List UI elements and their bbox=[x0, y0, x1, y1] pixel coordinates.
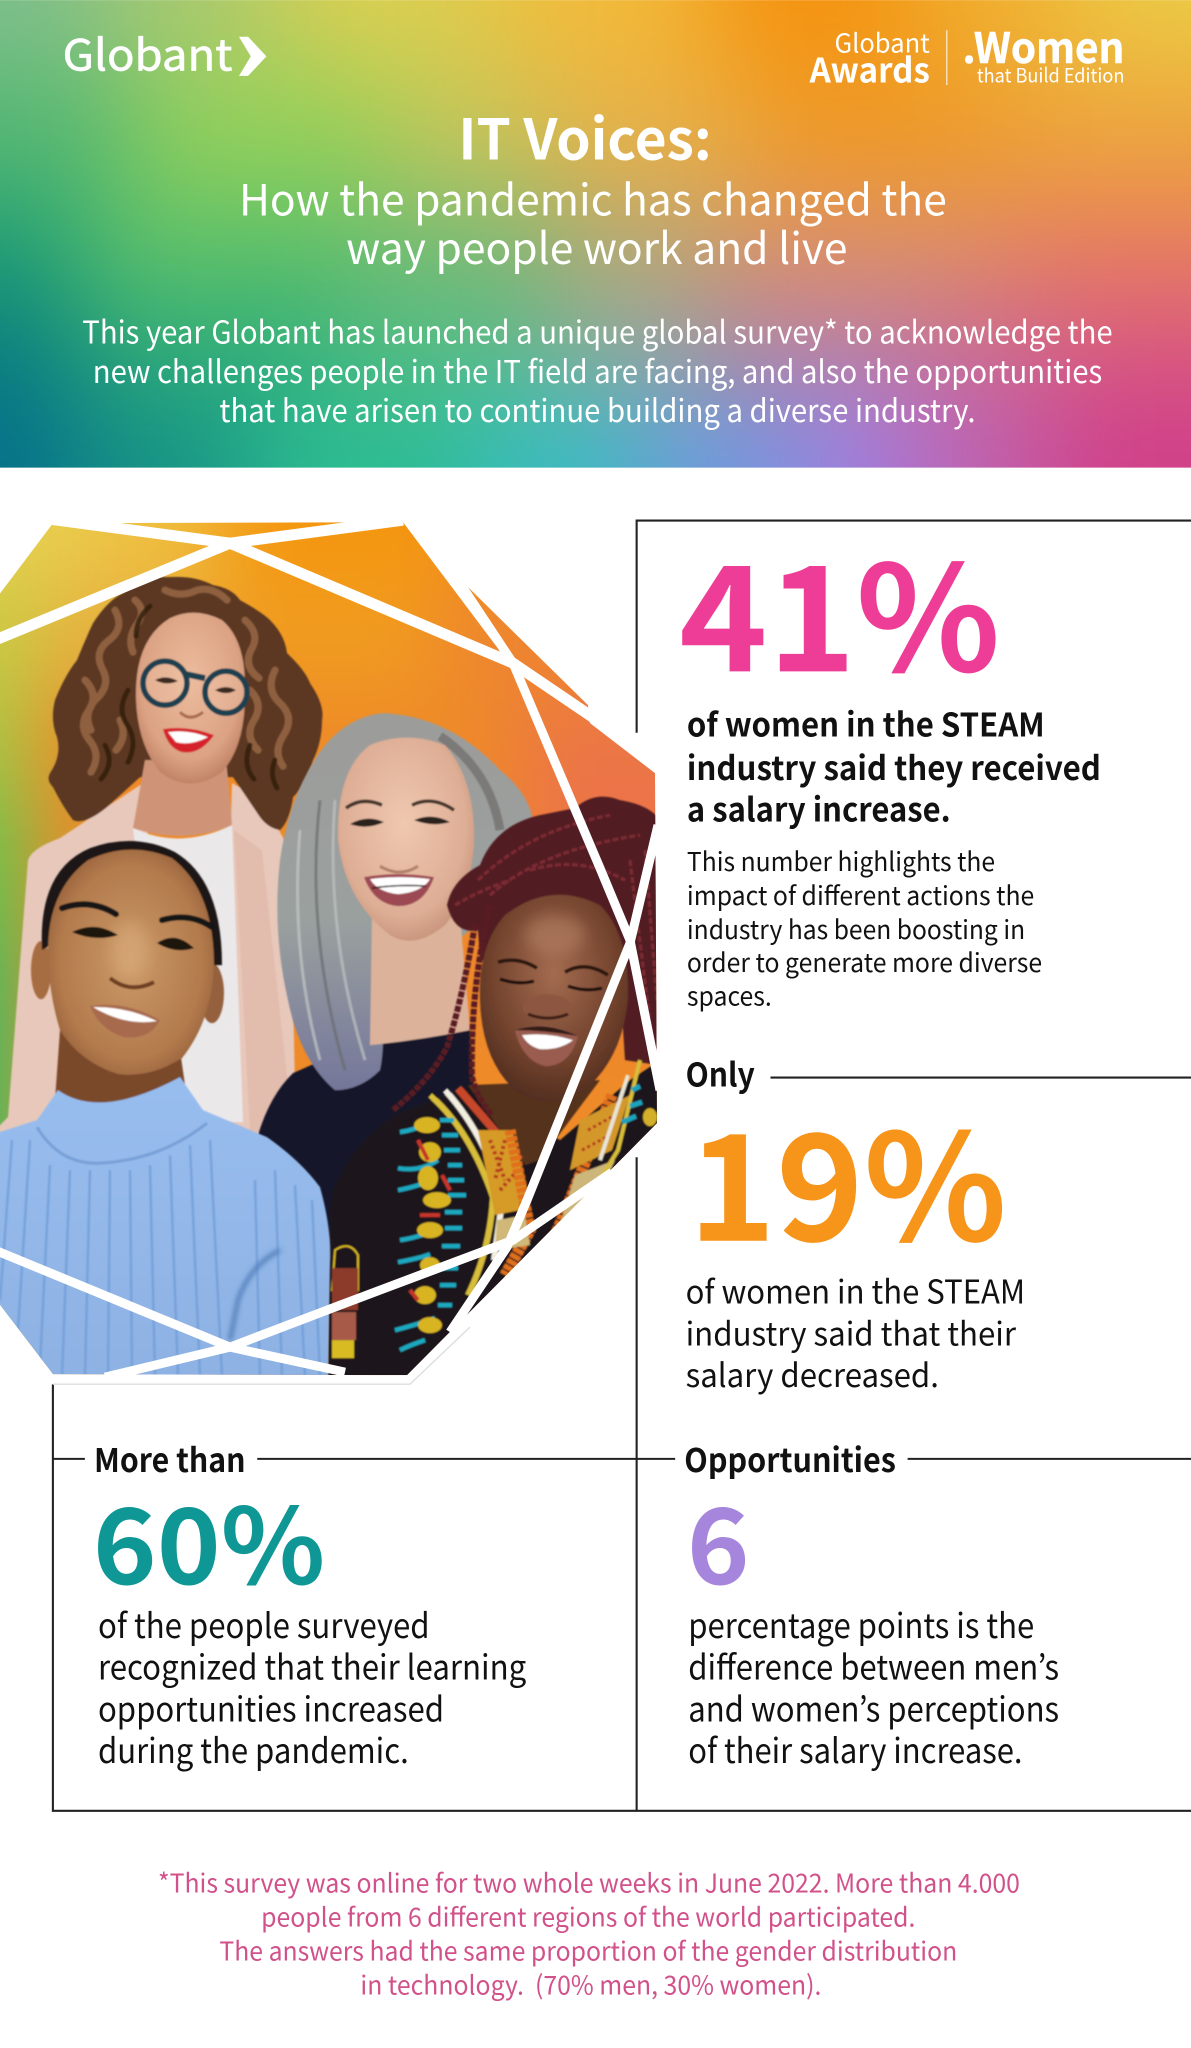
smile bbox=[515, 1025, 578, 1066]
collar bbox=[37, 1123, 207, 1163]
curly hair bbox=[49, 577, 322, 830]
grey hair bbox=[277, 713, 532, 1090]
stat: 41%: 41% bbox=[679, 502, 1000, 714]
label: More than: More than bbox=[94, 1435, 246, 1482]
text: salary decreased: of women in the STEAM bbox=[686, 1266, 1025, 1313]
text: salary decreased: industry said that their bbox=[686, 1308, 1016, 1355]
brows bbox=[498, 960, 608, 975]
logo: Globant Awards Women that Build Edition: .Women bbox=[962, 16, 1124, 76]
nose bbox=[380, 866, 418, 872]
logo: Globant Awards Women that Build Edition: Globant bbox=[834, 22, 930, 60]
jacket bbox=[0, 783, 296, 1135]
text: learning opportunities: recognized that their learning bbox=[98, 1641, 526, 1690]
logo: Globant: Globant bbox=[63, 22, 232, 84]
person: grey hair woman bbox=[258, 713, 532, 1260]
closed eyes bbox=[500, 979, 602, 990]
smile bbox=[364, 874, 434, 906]
polygon gradient background bbox=[0, 522, 657, 1376]
black top bbox=[258, 1029, 475, 1239]
label: Opportunities: Opportunities bbox=[684, 1435, 896, 1482]
intro paragraph bbox=[82, 309, 1113, 432]
neck bbox=[468, 1080, 600, 1165]
body text: diverse spaces bbox=[687, 841, 1042, 1014]
person: front woman in blue sweater bbox=[0, 841, 330, 1380]
neck and chest bbox=[133, 760, 232, 836]
text: perception difference: difference between men’s bbox=[688, 1641, 1059, 1690]
body text: diverse spaces: order to generate more diverse bbox=[687, 942, 1042, 980]
text: perception difference: percentage points is the bbox=[688, 1599, 1034, 1648]
locs back bbox=[447, 797, 660, 1065]
footnote: people from 6 different regions of the world participated. bbox=[261, 1896, 915, 1934]
hair curls highlights bbox=[83, 589, 289, 772]
subtitle: way people work and live bbox=[346, 215, 848, 277]
stat: 6: 6 bbox=[687, 1464, 750, 1615]
shirt pattern bbox=[332, 1060, 657, 1358]
eyes bbox=[350, 817, 450, 827]
logo: Globant Awards Women that Build Edition bbox=[809, 16, 1124, 92]
logo: Globant Awards Women that Build Edition: Awards bbox=[809, 43, 930, 92]
photo panel: four smiling women on gradient polygon bbox=[0, 522, 657, 1385]
bold statement: salary increase bbox=[687, 700, 1101, 832]
nose highlight bbox=[112, 922, 148, 978]
subtitle: How the pandemic has changed the bbox=[239, 167, 947, 229]
panel frame lines bbox=[52, 521, 1191, 1811]
hanging locs bbox=[393, 905, 492, 1115]
text: salary decreased bbox=[686, 1266, 1025, 1397]
subtitle bbox=[239, 167, 947, 277]
nose bbox=[110, 978, 154, 987]
text: perception difference: and women’s perceptions bbox=[688, 1682, 1059, 1731]
sweater bbox=[0, 1077, 330, 1380]
body text: diverse spaces: industry has been boosting in bbox=[687, 909, 1025, 947]
footnote: *This survey was online for two whole weeks in June 2022. More than 4.000 bbox=[158, 1862, 1020, 1900]
bold statement: salary increase: industry said they received bbox=[687, 743, 1101, 790]
face bbox=[338, 738, 474, 941]
lips bbox=[163, 728, 214, 753]
eyes bbox=[155, 677, 236, 693]
face bbox=[136, 613, 245, 784]
title: IT Voices: bbox=[458, 95, 712, 176]
white crossing lines over photo bbox=[0, 519, 660, 1377]
neck bbox=[54, 1030, 186, 1104]
armpit fold bbox=[230, 1250, 280, 1340]
logo: Globant Awards Women that Build Edition: that Build Edition bbox=[977, 59, 1124, 88]
label: Only: Only bbox=[686, 1050, 755, 1097]
shirt bbox=[328, 1060, 660, 1380]
footnote: in technology. (70% men, 30% women). bbox=[360, 1964, 821, 2002]
text: learning opportunities: of the people surveyed bbox=[98, 1599, 430, 1648]
intro paragraph: new challenges people in the IT field are facing, and also the opportunities bbox=[93, 348, 1102, 393]
ears bbox=[31, 941, 51, 999]
forehead shine bbox=[525, 915, 585, 955]
person: woman with dark red locs and patterned shirt bbox=[328, 797, 660, 1380]
intro paragraph: that have arisen to continue building a diverse industry. bbox=[219, 387, 976, 432]
icon: Globant chevron bbox=[239, 37, 266, 76]
person: curly hair woman with glasses bbox=[0, 577, 322, 1135]
text: learning opportunities bbox=[98, 1599, 526, 1773]
text: perception difference: of their salary increase. bbox=[688, 1724, 1023, 1773]
text: salary decreased: salary decreased. bbox=[686, 1350, 939, 1397]
brows bbox=[62, 904, 212, 927]
body text: diverse spaces: This number highlights the bbox=[687, 841, 995, 879]
stat: 19%: 19% bbox=[688, 1071, 1007, 1284]
smile bbox=[90, 1005, 160, 1038]
body text: diverse spaces: spaces. bbox=[687, 976, 772, 1014]
bold statement: salary increase: a salary increase. bbox=[687, 785, 951, 832]
face bbox=[48, 850, 214, 1075]
hair bbox=[42, 841, 222, 965]
text: perception difference bbox=[688, 1599, 1059, 1773]
bold statement: salary increase: of women in the STEAM bbox=[687, 700, 1045, 747]
white shirt bbox=[133, 825, 243, 1122]
footnote bbox=[158, 1862, 1020, 2002]
nose bbox=[180, 712, 203, 717]
nose bbox=[539, 994, 565, 1004]
stat: 60%: 60% bbox=[93, 1464, 325, 1615]
face bbox=[480, 895, 628, 1102]
brows bbox=[346, 801, 454, 810]
body text: diverse spaces: impact of different actions the bbox=[687, 875, 1034, 913]
sweater ribs bbox=[0, 1140, 320, 1375]
text: learning opportunities: opportunities increased bbox=[98, 1682, 444, 1731]
glasses bbox=[143, 661, 247, 713]
footnote: The answers had the same proportion of the gender distribution bbox=[219, 1930, 957, 1968]
text: learning opportunities: during the pandemic. bbox=[98, 1724, 409, 1773]
intro paragraph: This year Globant has launched a unique global survey* to acknowledge the bbox=[82, 309, 1113, 354]
header gradient banner bbox=[0, 0, 1191, 468]
pale halo line under photo bbox=[53, 1327, 470, 1384]
neck bbox=[370, 915, 470, 1045]
eyes bbox=[72, 927, 194, 950]
